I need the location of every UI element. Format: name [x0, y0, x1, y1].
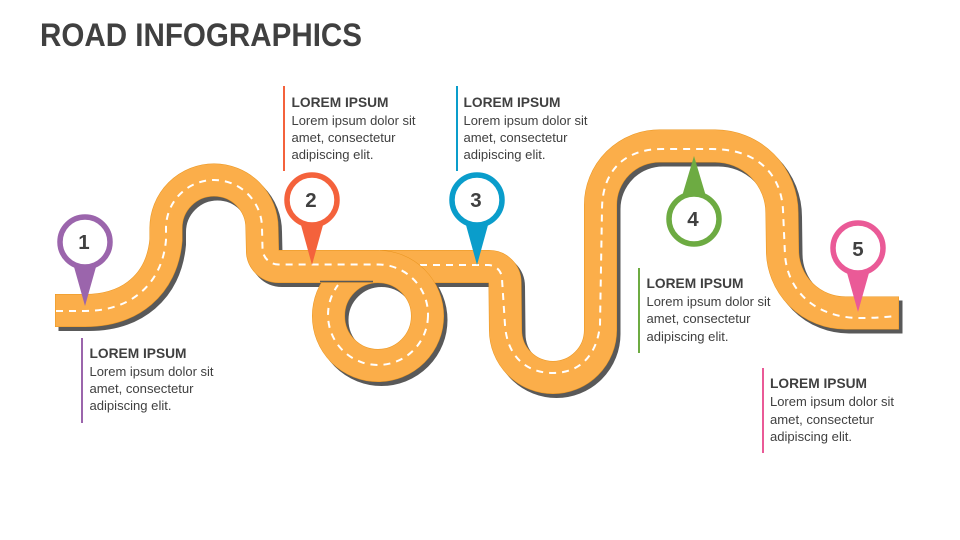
- pin 4: 4: [687, 208, 699, 231]
- pin 5: [833, 223, 883, 312]
- text block 3: adipiscing elit.: [464, 148, 546, 162]
- text block 2: LOREM IPSUM: [292, 94, 388, 110]
- text block 1: [81, 338, 214, 423]
- pin 2: 2: [305, 189, 317, 212]
- text block 4: adipiscing elit.: [646, 330, 728, 344]
- text block 2: adipiscing elit.: [292, 148, 374, 162]
- pin 5: 5: [852, 238, 864, 261]
- text block 5: [762, 368, 895, 453]
- text block 4: [638, 268, 771, 353]
- text block 2: amet, consectetur: [292, 131, 396, 145]
- text block 5: Lorem ipsum dolor sit: [770, 395, 895, 409]
- road: [55, 146, 902, 382]
- text block 1: adipiscing elit.: [90, 399, 172, 413]
- text block 3: Lorem ipsum dolor sit: [464, 114, 588, 128]
- text block 5: adipiscing elit.: [770, 430, 852, 444]
- pin 2: [287, 175, 337, 265]
- text block 2: Lorem ipsum dolor sit: [292, 114, 416, 128]
- pin 1: [60, 217, 110, 306]
- text block 3: amet, consectetur: [464, 131, 568, 145]
- text block 1: Lorem ipsum dolor sit: [90, 365, 214, 379]
- text block 5: amet, consectetur: [770, 413, 874, 427]
- pin 4: [669, 156, 719, 244]
- text block 4: amet, consectetur: [646, 312, 750, 326]
- text block 4: Lorem ipsum dolor sit: [646, 295, 771, 309]
- pin 1: 1: [78, 231, 90, 254]
- pin 3: [452, 175, 502, 265]
- pin 3: 3: [470, 189, 482, 212]
- text block 1: amet, consectetur: [90, 382, 194, 396]
- text block 4: LOREM IPSUM: [646, 275, 744, 291]
- text block 5: LOREM IPSUM: [770, 375, 867, 391]
- title: ROAD INFOGRAPHICS: [40, 17, 362, 53]
- text block 3: LOREM IPSUM: [464, 94, 560, 110]
- text block 1: LOREM IPSUM: [90, 345, 186, 361]
- text block 3: [456, 86, 588, 171]
- text block 2: [283, 86, 416, 171]
